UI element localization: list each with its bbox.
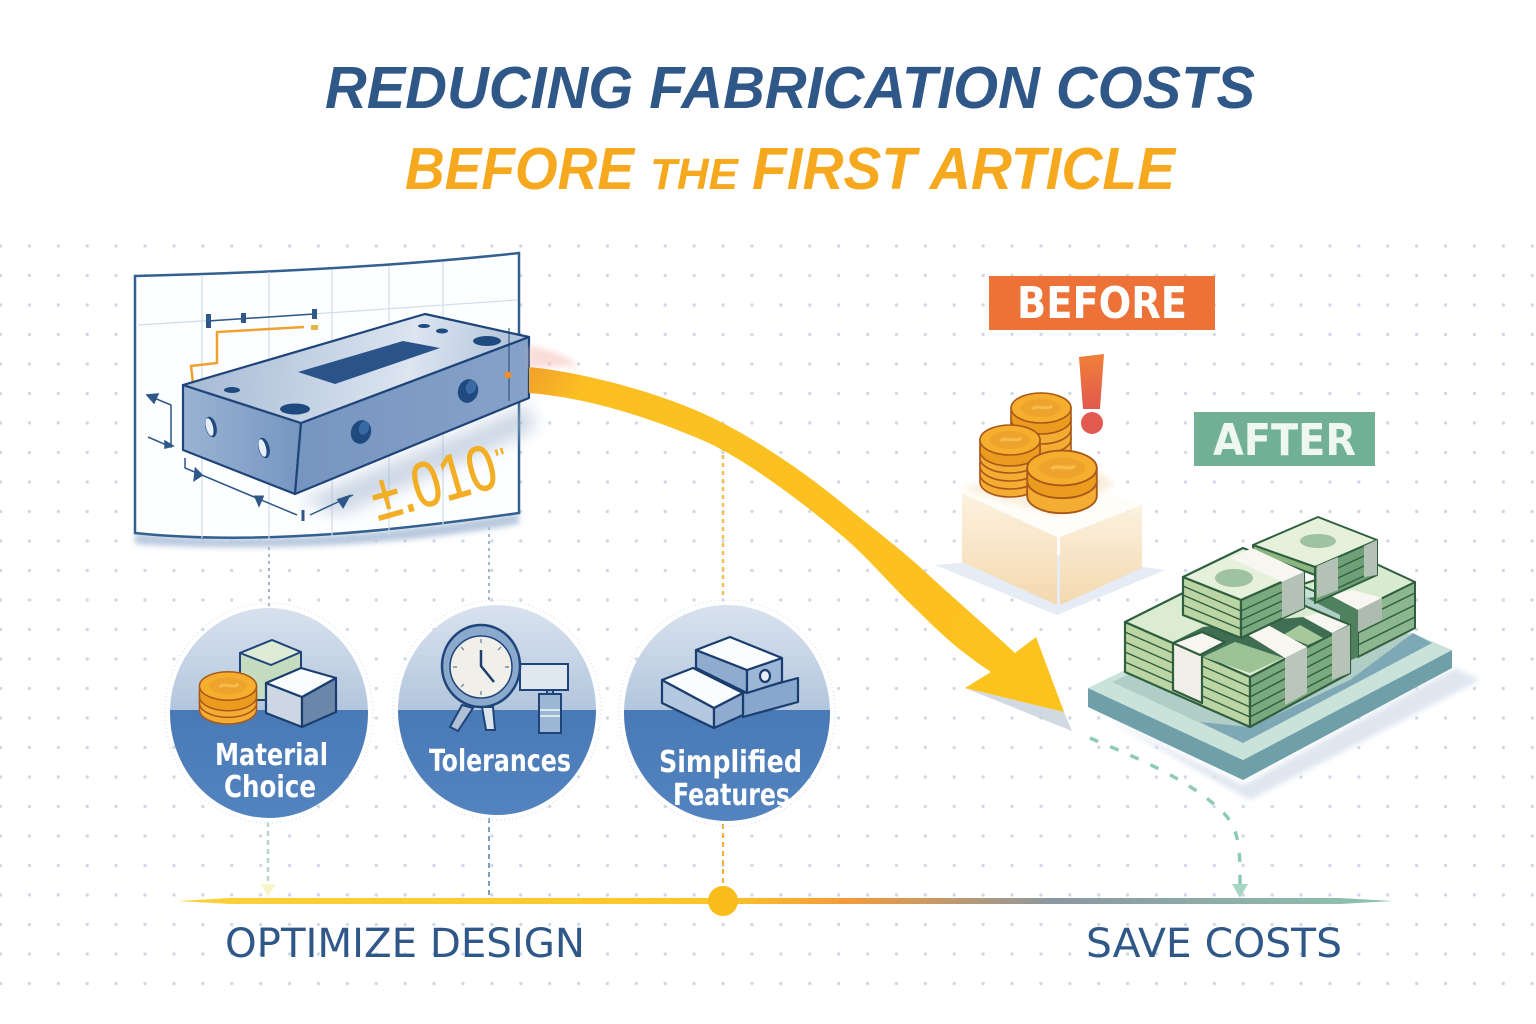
label — [215, 738, 328, 805]
label: Choice — [224, 770, 316, 805]
badge halo — [619, 600, 835, 826]
icon: coin stack — [200, 672, 256, 724]
badge: material choice — [160, 600, 380, 825]
icon: green cube — [240, 640, 301, 700]
orange tolerance trace — [191, 325, 318, 383]
connector: design to material choice — [268, 547, 270, 606]
connector: design to tolerances — [488, 527, 490, 604]
title — [325, 55, 1255, 202]
arrow shadow at head — [965, 688, 1072, 731]
connector: material choice to timeline — [267, 822, 269, 884]
circle background — [624, 605, 830, 821]
label — [659, 745, 802, 813]
cash bundle: upper back — [1253, 517, 1377, 603]
arrow glow at block edge — [529, 346, 578, 368]
timeline marker — [708, 886, 738, 916]
cash bundle: upper front — [1183, 548, 1304, 638]
cash bundle: back right — [1300, 562, 1415, 665]
blueprint sheet — [135, 253, 519, 538]
badge halo — [393, 600, 601, 820]
cash bundle: lower front — [1125, 572, 1350, 727]
connector: simplified features to timeline — [722, 824, 724, 888]
machined block — [183, 314, 529, 494]
blueprint sheet shadow — [135, 513, 519, 547]
timeline bar — [178, 898, 1393, 904]
label: Tolerances — [429, 744, 571, 779]
background dot grid — [0, 231, 1536, 1001]
after: money platform — [1088, 585, 1480, 800]
connector: tolerances to timeline — [488, 818, 490, 895]
blueprint grid — [138, 262, 517, 540]
badge halo — [165, 603, 373, 823]
title: BEFORE — [405, 136, 636, 202]
icon: gauge dial — [442, 625, 520, 707]
title: THE — [650, 150, 740, 199]
dimension line: top — [206, 309, 317, 328]
arrowhead: material choice connector — [261, 884, 276, 897]
arrow: design flows to savings — [529, 367, 1064, 712]
circle background — [398, 605, 596, 815]
tolerance callout: " — [492, 442, 511, 477]
label: optimize design: OPTIMIZE DESIGN — [225, 921, 585, 967]
label: after: AFTER — [1213, 415, 1356, 466]
label: before: BEFORE — [1017, 278, 1187, 329]
badge: simplified features — [619, 600, 840, 826]
tolerance callout: ±.010 — [362, 430, 505, 534]
before: coin stacks — [980, 393, 1097, 513]
circle background — [170, 608, 368, 818]
label: Simplified — [659, 745, 802, 780]
arrowhead: savings drop — [1232, 884, 1248, 898]
label: Features — [673, 778, 790, 813]
connector: arrow to simplified features — [722, 447, 724, 597]
icon: white cube — [266, 668, 336, 727]
after: cash stacks — [1125, 517, 1415, 727]
before: pedestal — [935, 470, 1165, 615]
panel: blueprint with machined block — [135, 253, 535, 547]
dashed path: savings drop to timeline — [1090, 738, 1240, 885]
icon: warning exclamation — [1079, 354, 1104, 434]
label: save costs: SAVE COSTS — [1086, 921, 1342, 967]
block shadow — [300, 405, 535, 515]
badge: tolerances — [390, 600, 610, 820]
title: REDUCING FABRICATION COSTS — [325, 55, 1255, 121]
dimension arrows — [147, 394, 353, 521]
label: Material — [215, 738, 328, 773]
icon: gauge stand — [450, 664, 568, 733]
title: FIRST ARTICLE — [752, 136, 1177, 202]
icon: stepped blocks — [662, 637, 798, 728]
